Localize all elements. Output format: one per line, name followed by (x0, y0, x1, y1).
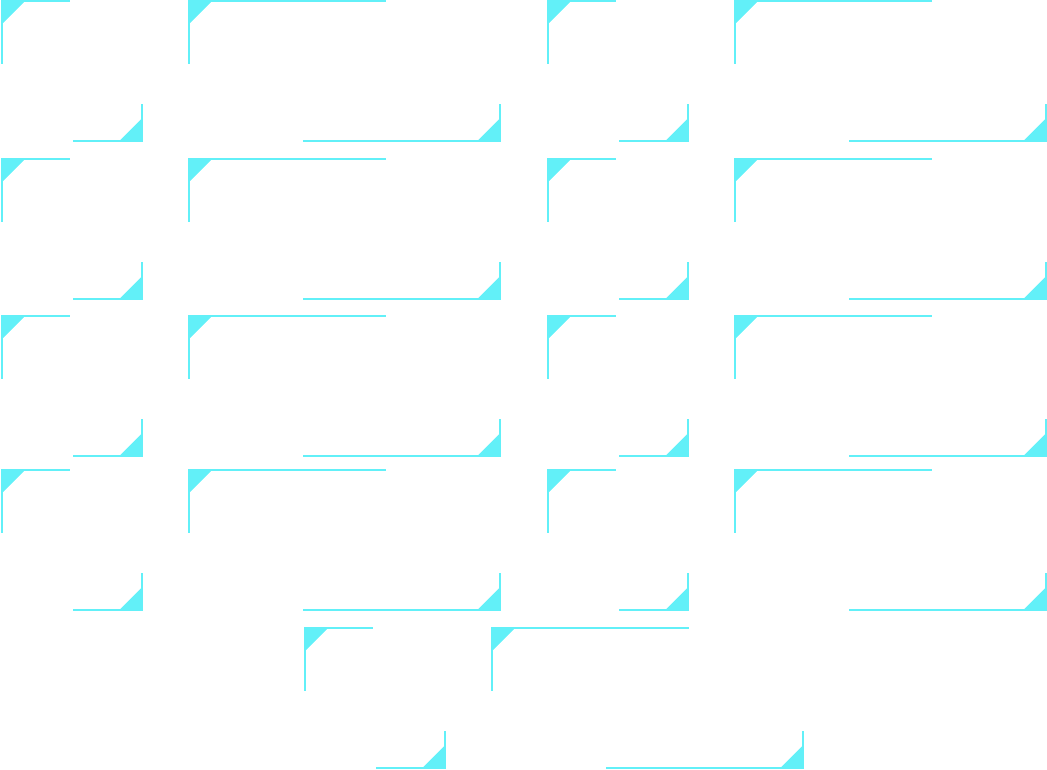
row 2 small frame C (547, 158, 689, 300)
row 4 small frame C (547, 469, 689, 611)
row 1 small frame A (1, 0, 143, 142)
row 5 small frame (304, 627, 446, 769)
row 3 large frame D (734, 315, 1047, 457)
row 1 small frame C (547, 0, 689, 142)
row 3 small frame C (547, 315, 689, 457)
row 2 large frame D (734, 158, 1047, 300)
row 1 large frame D (734, 0, 1047, 142)
row 2 small frame A (1, 158, 143, 300)
row 5 large frame (491, 627, 804, 769)
row 2 large frame B (188, 158, 501, 300)
row 3 large frame B (188, 315, 501, 457)
row 4 large frame B (188, 469, 501, 611)
row 4 large frame D (734, 469, 1047, 611)
row 4 small frame A (1, 469, 143, 611)
row 3 small frame A (1, 315, 143, 457)
row 1 large frame B (188, 0, 501, 142)
